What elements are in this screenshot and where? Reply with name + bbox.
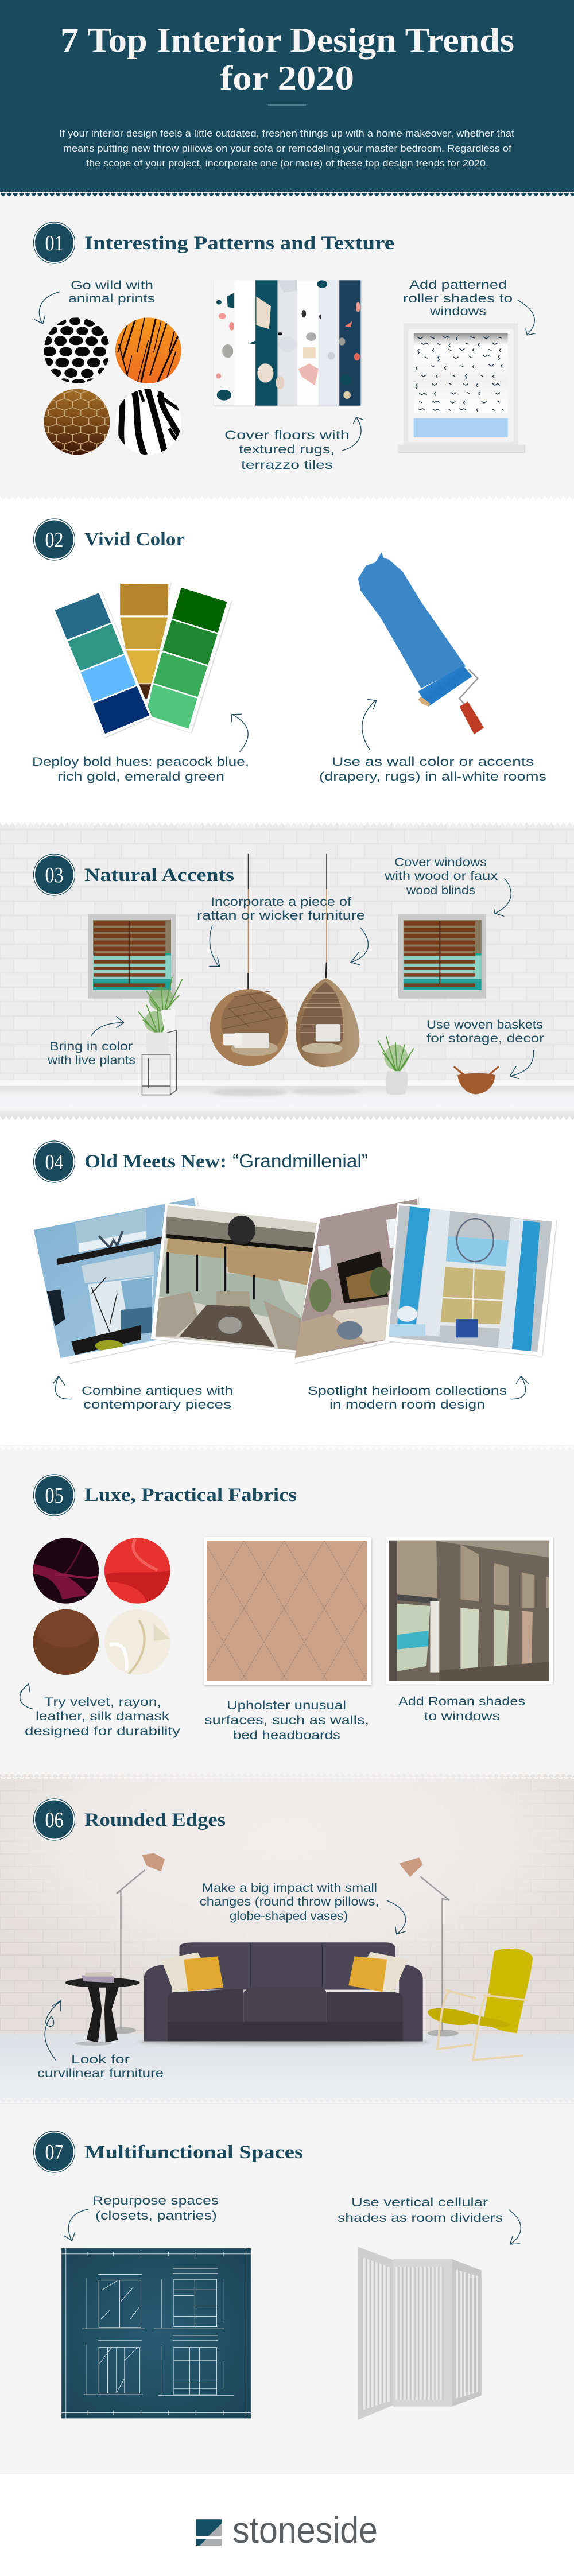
intro paragraph: the scope of your project, incorporate one (or more) of these top design trends for 2020.: [86, 158, 488, 169]
section 3 badge: [33, 854, 75, 895]
terrazzo caption: [224, 429, 350, 472]
room divider screen: [358, 2247, 482, 2420]
roller shade caption: windows: [429, 305, 486, 318]
terrazzo tiles: [214, 280, 360, 406]
roller shade caption: Add patterned: [409, 278, 507, 292]
roller caption: Use as wall color or accents: [332, 755, 534, 769]
hanging wicker chairs: [210, 854, 360, 1096]
impact caption: [200, 1881, 379, 1923]
zigzag bottom of section 1: [0, 495, 574, 500]
upholster caption: surfaces, such as walls,: [204, 1714, 369, 1727]
photo: blue room: [30, 1196, 199, 1364]
vertical shades caption: shades as room dividers: [338, 2212, 503, 2225]
roman shades caption: [398, 1695, 525, 1723]
roller shade caption: roller shades to: [403, 292, 513, 305]
stoneside wordmark: stoneside: [232, 2509, 378, 2551]
arrow to roller: [362, 700, 377, 750]
live plants caption: [47, 1040, 135, 1067]
floor lamp right: [399, 1857, 459, 2036]
section 1 heading: Interesting Patterns and Texture: [84, 233, 394, 254]
swatch caption: Deploy bold hues: peacock blue,: [32, 755, 249, 769]
live plants caption: Bring in color: [49, 1040, 133, 1053]
upholster caption: Upholster unusual: [227, 1699, 346, 1712]
footer panel: [0, 2474, 574, 2576]
terrazzo caption: textured rugs,: [239, 443, 335, 456]
section 7 panel: Multifunctional Spaces: [0, 2105, 574, 2474]
section 3 heading: Natural Accents: [84, 865, 234, 886]
curvilinear caption: curvilinear furniture: [37, 2067, 164, 2080]
floor lamp left: [106, 1853, 165, 2034]
section 2 badge: [33, 519, 75, 560]
section 6 badge: [33, 1799, 75, 1840]
terrazzo caption: Cover floors with: [224, 429, 350, 442]
intro paragraph: If your interior design feels a little outdated, freshen things up with a home makeover, whether that: [59, 128, 514, 139]
section 6 panel: Rounded Edges: [0, 1774, 574, 2101]
zigzag bottom of section 3: [0, 1116, 574, 1121]
impact caption: changes (round throw pillows,: [200, 1895, 379, 1908]
arrow to divider: [509, 2210, 521, 2244]
antiques caption: [82, 1384, 233, 1411]
upholster caption: [204, 1699, 369, 1742]
baskets caption: [426, 1018, 544, 1045]
section 4 heading: “Grandmillenial”: [232, 1150, 368, 1171]
section 2 panel: Vivid Color: [32, 519, 546, 783]
photo: dining room: [151, 1203, 320, 1353]
section 7 badge: 07: [45, 2140, 63, 2164]
section 2 heading: Vivid Color: [84, 529, 185, 550]
section 4 heading: [84, 1150, 368, 1172]
wood blinds caption: [384, 856, 498, 897]
repurpose caption: (closets, pantries): [95, 2209, 217, 2222]
woven basket: [454, 1066, 499, 1095]
roman shades caption: Add Roman shades: [398, 1695, 525, 1708]
roman shades photo: [386, 1537, 553, 1685]
zigzag bottom of section 6: [0, 2100, 574, 2105]
header band: [0, 0, 574, 196]
wicker furniture caption: [197, 895, 365, 922]
arrow to window: [518, 300, 536, 335]
section 4 panel: Old Meets New: [29, 1141, 556, 1411]
section 1 panel: Interesting Patterns and Texture: [0, 196, 574, 496]
sofa: [137, 1942, 430, 2046]
title: [60, 21, 514, 97]
section 1 badge: 01: [45, 231, 63, 255]
heirloom caption: [308, 1384, 507, 1411]
arrow up right: [510, 1376, 529, 1399]
stoneside logo mark: [196, 2519, 222, 2546]
title: 7 Top Interior Design Trends: [60, 21, 514, 59]
arrow to basket: [510, 1050, 533, 1078]
wicker furniture caption: rattan or wicker furniture: [197, 909, 365, 922]
section 4 badge: [33, 1141, 75, 1182]
quilted fabric photo: [204, 1537, 371, 1685]
baskets caption: Use woven baskets: [426, 1018, 543, 1031]
antiques caption: contemporary pieces: [83, 1398, 231, 1411]
animal prints caption: animal prints: [68, 292, 155, 305]
window with roller shade: [398, 323, 524, 452]
antiques caption: Combine antiques with: [82, 1384, 233, 1398]
yellow armchair: [428, 1949, 533, 2060]
curvilinear caption: Look for: [71, 2053, 130, 2066]
arrow to animal prints: [34, 292, 60, 324]
section 5 badge: 05: [45, 1484, 63, 1508]
sofa pillows: [161, 1952, 408, 1992]
arrow to table: [45, 2001, 60, 2060]
roller caption: (drapery, rugs) in all-white rooms: [319, 770, 546, 783]
arrow to right window: [494, 879, 511, 916]
animal print circles: [40, 316, 185, 455]
wood blinds caption: wood blinds: [406, 884, 475, 897]
wood blinds caption: with wood or faux: [384, 870, 498, 883]
wood blind window left: [88, 914, 176, 999]
left blue swatch: [52, 591, 152, 738]
terrazzo caption: terrazzo tiles: [241, 459, 333, 472]
blueprint: [61, 2248, 251, 2418]
arrow to terrazzo: [342, 417, 363, 451]
section 6 badge: 06: [45, 1808, 63, 1832]
animal prints caption: [68, 279, 155, 305]
section 4 badge: 04: [45, 1150, 63, 1174]
section 5 panel: Luxe, Practical Fabrics: [0, 1445, 574, 1775]
animal prints caption: Go wild with: [71, 279, 153, 292]
section 6 heading: Rounded Edges: [84, 1810, 226, 1830]
section 3 panel: Natural Accents: [0, 821, 574, 1116]
wicker furniture caption: Incorporate a piece of: [211, 895, 351, 909]
section 5 heading: Luxe, Practical Fabrics: [84, 1485, 297, 1506]
section 4 heading: Old Meets New:: [84, 1151, 227, 1172]
arrow to sofa: [387, 1901, 406, 1934]
arrow to blueprint: [64, 2209, 88, 2241]
fabrics caption: designed for durability: [25, 1725, 181, 1738]
arrow up to fabrics: [20, 1684, 32, 1709]
fabrics caption: Try velvet, rayon,: [44, 1696, 161, 1709]
wood blinds caption: Cover windows: [394, 856, 487, 869]
live plants caption: with live plants: [47, 1054, 135, 1067]
roman shades caption: to windows: [424, 1710, 500, 1723]
upholster caption: bed headboards: [233, 1729, 340, 1742]
baskets caption: for storage, decor: [426, 1032, 544, 1045]
vertical shades caption: [338, 2196, 503, 2225]
repurpose caption: Repurpose spaces: [92, 2194, 219, 2208]
photo: blue curtains room: [385, 1203, 556, 1356]
side table with books: [65, 1972, 140, 2046]
arrow up left: [53, 1376, 71, 1399]
paint roller and stroke: [358, 552, 484, 734]
arrow to swatches: [232, 714, 248, 752]
arrow to plant: [91, 1017, 124, 1035]
impact caption: globe-shaped vases): [230, 1910, 348, 1923]
section 1 badge: [33, 222, 75, 263]
photo: art and sofa room: [293, 1196, 421, 1363]
section 7 badge: [33, 2131, 75, 2172]
fabrics caption: leather, silk damask: [36, 1710, 170, 1723]
section 7 heading: Multifunctional Spaces: [84, 2142, 303, 2163]
intro paragraph: means putting new throw pillows on your sofa or remodeling your master bedroom. Regardless of: [63, 143, 511, 154]
impact caption: Make a big impact with small: [202, 1881, 377, 1895]
small potted plant: [378, 1037, 414, 1095]
section 3 badge: 03: [45, 863, 63, 887]
paint swatches: [52, 582, 231, 738]
fabrics caption: [25, 1696, 181, 1738]
vertical shades caption: Use vertical cellular: [351, 2196, 488, 2209]
curvilinear caption: [37, 2053, 164, 2080]
middle gold swatch: [118, 582, 170, 700]
heirloom caption: in modern room design: [329, 1398, 485, 1411]
roller caption: [319, 755, 546, 783]
heirloom caption: Spotlight heirloom collections: [308, 1384, 507, 1398]
repurpose caption: [92, 2194, 219, 2222]
right green swatch: [142, 585, 231, 733]
swatch caption: [32, 755, 249, 783]
arrows to chairs: [210, 925, 368, 966]
section 5 badge: [33, 1475, 75, 1516]
title: for 2020: [220, 59, 354, 97]
potted plant on stand: [138, 977, 183, 1095]
intro paragraph: [59, 128, 514, 169]
wood blind window right: [398, 914, 486, 999]
roller shade caption: [403, 278, 513, 318]
fabric swatch circles: [31, 1537, 172, 1677]
section 2 badge: 02: [45, 528, 63, 552]
swatch caption: rich gold, emerald green: [57, 770, 224, 783]
